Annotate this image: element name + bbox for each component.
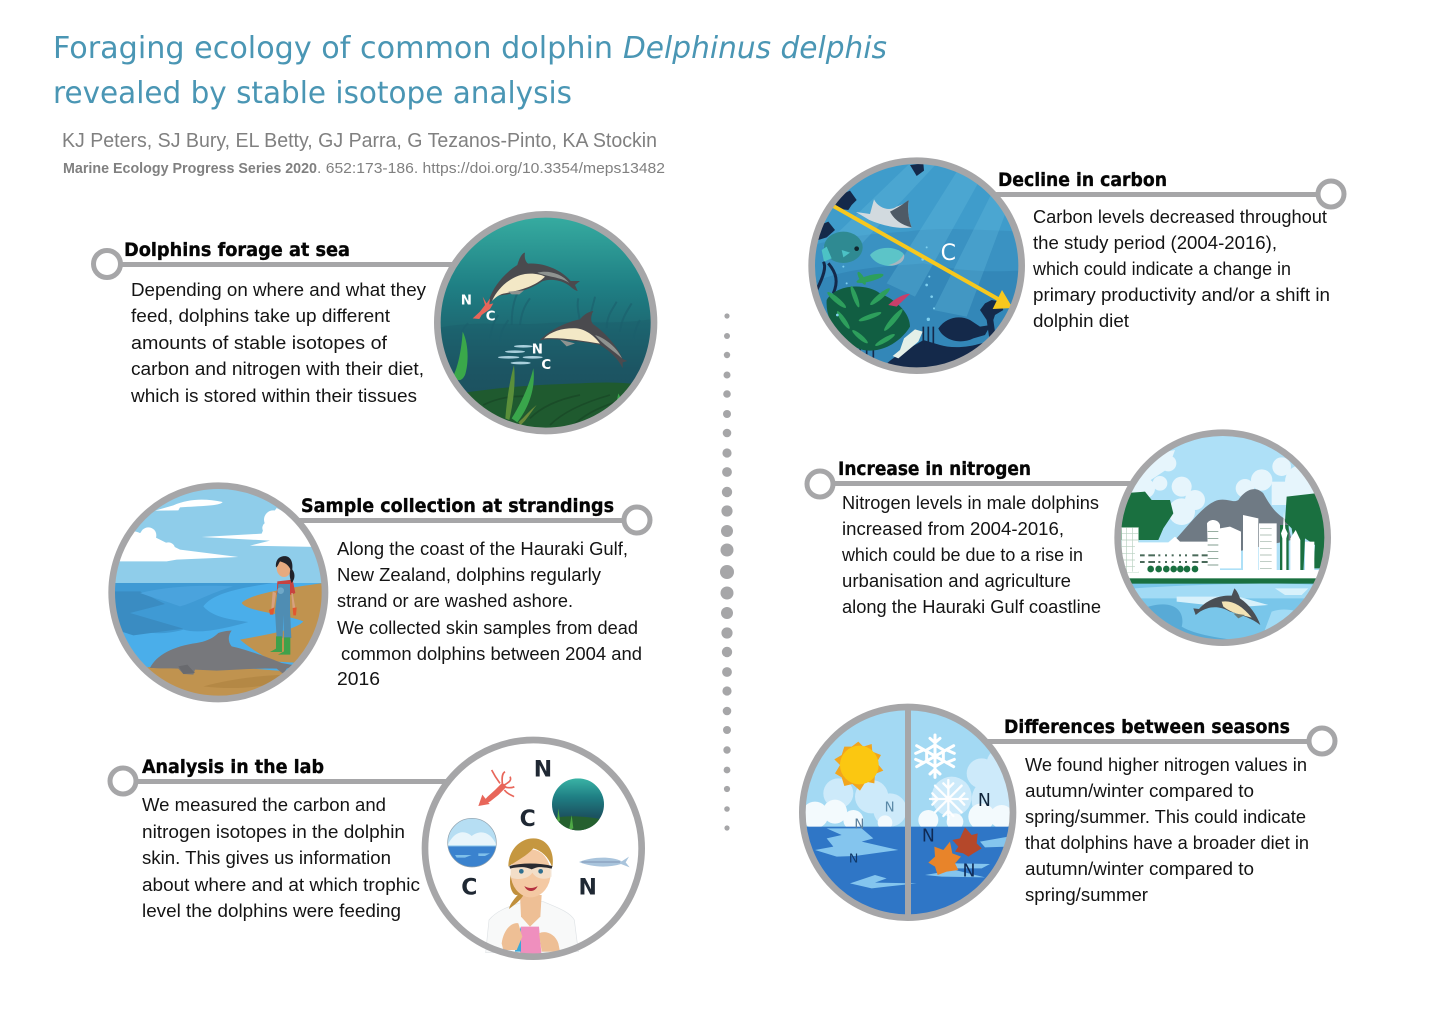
text block: Depending on where and what they [131,279,427,300]
text block: primary productivity and/or a shift in [1033,284,1330,305]
text block: spring/summer [1025,884,1148,905]
heading: Decline in carbon [998,169,1167,191]
isotope labels: N [978,791,991,811]
connector line and ring [110,768,450,794]
text block: about where and at which trophic [142,874,420,895]
illustration: stranded dolphin on beach [108,482,328,702]
isotope labels: C [520,807,536,832]
isotope labels: N [532,343,543,358]
isotope labels [461,758,597,901]
carbon label: C [941,241,956,266]
teal fish [822,232,863,263]
panel: differences between seasons [795,700,1335,933]
water highlights [815,828,1008,888]
heading: Dolphins forage at sea [124,239,350,261]
text block: spring/summer. This could indicate [1025,806,1306,827]
heading: Differences between seasons [1004,716,1290,738]
dotted timeline [720,313,734,831]
dolphin 2 [539,311,627,368]
text block: which is stored within their tissues [130,385,417,406]
text block [130,279,427,406]
isotope labels: N [854,817,864,832]
text block: level the dolphins were feeding [142,900,401,921]
heading: Sample collection at strandings [301,495,614,517]
snowflakes [916,735,954,777]
title: revealed by stable isotope analysis [53,76,572,111]
citation: . 652:173-186. https://doi.org/10.3354/meps13482 [317,161,665,177]
mini sea and sky [448,818,496,868]
text block: common dolphins between 2004 and [341,643,642,664]
isotope labels: N [922,827,935,847]
dolphin 1 [489,253,580,304]
isotope labels: C [541,358,551,373]
text block: dolphin diet [1033,310,1129,331]
text block: the study period (2004-2016), [1033,232,1277,253]
panel: decline in carbon [800,150,1344,383]
text block: skin. This gives us information [142,847,391,868]
text block: urbanisation and agriculture [842,570,1071,591]
connector line and ring [94,250,455,278]
text block: which could be due to a rise in [841,544,1083,565]
text block: We found higher nitrogen values in [1025,754,1307,775]
connector line and ring [298,507,650,533]
heading: Analysis in the lab [142,756,324,778]
panel: dolphins forage at sea [94,205,663,438]
isotope labels [461,293,551,373]
connector line and ring [807,471,1135,497]
bubbles [836,246,935,321]
text block: Nitrogen levels in male dolphins [842,492,1099,513]
connector line and ring [990,181,1344,207]
panel: analysis in the lab [110,740,642,957]
fish school [498,345,543,364]
text block: carbon and nitrogen with their diet, [131,358,424,379]
isotope labels: N [849,851,858,866]
heading: Increase in nitrogen [838,458,1031,480]
authors: KJ Peters, SJ Bury, EL Betty, GJ Parra, G Tezanos-Pinto, KA Stockin [62,129,657,152]
title [53,31,887,111]
citation [63,161,665,177]
eagle ray [856,199,912,228]
fish [579,857,630,867]
illustration: scientist in lab [425,740,642,957]
scientist [486,838,578,957]
text block: 2016 [337,668,380,689]
illustration: reef with decline arrow [808,157,1025,374]
text block: autumn/winter compared to [1025,780,1254,801]
text block: Along the coast of the Hauraki Gulf, [337,538,628,559]
yellow decline arrow [833,206,1013,309]
illustration: seasons split circle [799,704,1016,921]
text block: along the Hauraki Gulf coastline [842,596,1101,617]
stranded dolphin [150,631,295,675]
person [269,556,297,655]
seaweed [827,287,910,351]
connector line and ring [985,728,1335,754]
citation: Marine Ecology Progress Series 2020 [63,161,317,177]
text block: which could indicate a change in [1032,258,1291,279]
shrimp [478,770,514,806]
panel: sample collection at strandings [100,478,650,711]
mini ocean [552,778,605,832]
text block: feed, dolphins take up different [131,305,390,326]
text block [337,538,642,689]
text block [1025,754,1309,905]
title: Delphinus delphis [623,31,887,66]
text block [841,492,1101,617]
dolphin [1193,588,1260,625]
text block: We measured the carbon and [142,794,386,815]
shrimp [473,297,493,319]
illustration: coastal city [1114,429,1331,646]
text block: Carbon levels decreased throughout [1033,206,1327,227]
sun [834,742,883,791]
text block: autumn/winter compared to [1025,858,1254,879]
dark seabed [888,340,983,368]
isotope labels: N [578,876,597,901]
panel: increase in nitrogen [807,425,1338,658]
text block [142,794,420,921]
title: Foraging ecology of common dolphin [53,31,613,66]
text block: We collected skin samples from dead [337,617,638,638]
text block: New Zealand, dolphins regularly [337,564,602,585]
text block [1032,206,1330,331]
isotope labels [849,791,991,882]
isotope labels: N [885,801,895,816]
text block: increased from 2004-2016, [842,518,1064,539]
isotope labels: C [461,876,477,901]
text block: amounts of stable isotopes of [131,332,388,353]
autumn leaves [952,827,982,857]
white fish [893,329,923,358]
text block: that dolphins have a broader diet in [1025,832,1309,853]
text block: nitrogen isotopes in the dolphin [142,821,405,842]
text block: strand or are washed ashore. [337,590,573,611]
isotope labels: C [486,309,496,324]
isotope labels: N [461,293,472,308]
isotope labels: N [963,862,975,882]
illustration: dolphins under water [430,205,663,438]
isotope labels: N [534,758,552,783]
